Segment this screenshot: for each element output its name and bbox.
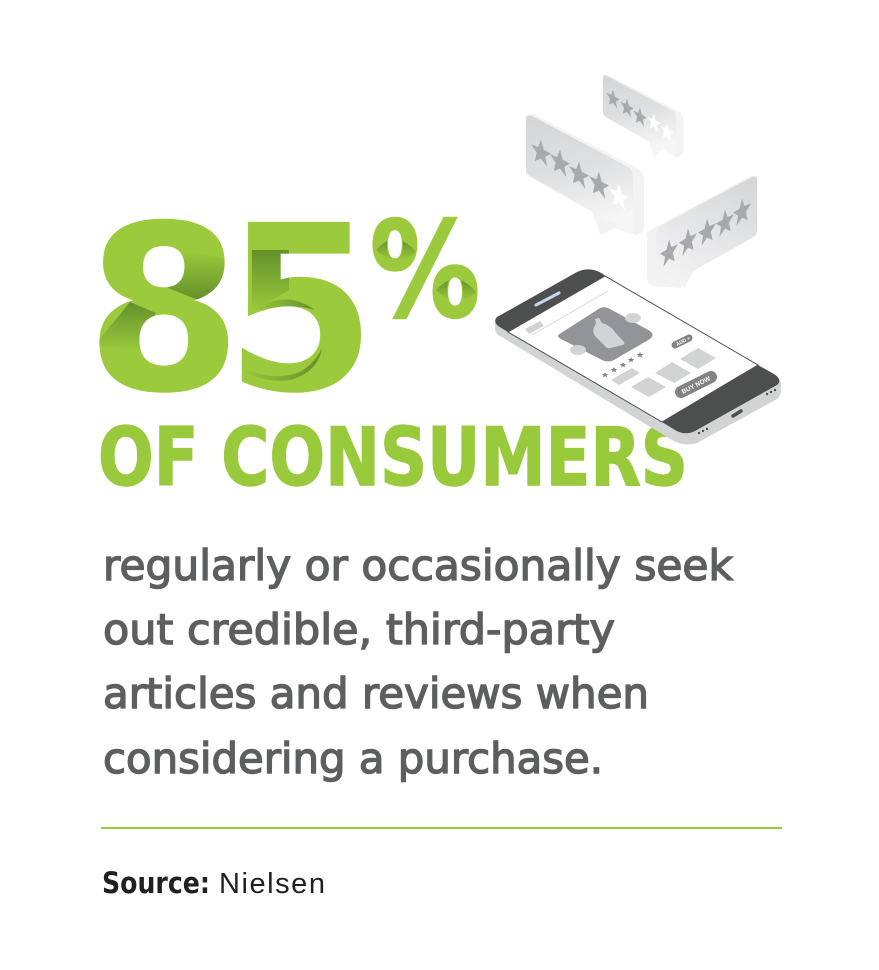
bottom bezel: [662, 365, 779, 433]
review bubble: three of five stars: [603, 75, 683, 158]
rating stars: [602, 352, 643, 377]
buy now button: [681, 377, 711, 392]
phone body: [495, 269, 781, 444]
body text: articles and reviews when: [103, 669, 649, 718]
body text: [103, 541, 734, 783]
source line: Source:: [102, 866, 210, 900]
infographic canvas: [99, 75, 782, 894]
product image tile: [558, 307, 652, 362]
source line: Nielsen: [219, 868, 325, 900]
body text: out credible, third-party: [103, 605, 615, 654]
thumbnails: [631, 377, 666, 397]
smartphone illustration: ADD +: [675, 336, 691, 348]
smartphone illustration: BUY NOW: [681, 375, 713, 396]
source line: [102, 866, 325, 900]
digit 5: 5: [225, 176, 376, 444]
top bezel: [495, 269, 605, 332]
review bubble: four of five stars: [526, 113, 644, 235]
percent sign: %: [370, 194, 480, 348]
speaker: [536, 293, 559, 305]
ribbon shading on digits: [95, 250, 322, 381]
headline: of consumers: OF CONSUMERS: [98, 411, 688, 504]
phone screen: [508, 276, 758, 422]
digit 8: 8: [86, 176, 242, 444]
body text: regularly or occasionally seek: [103, 541, 734, 590]
review bubble: five stars: [647, 176, 757, 288]
bottle: [593, 318, 624, 348]
body text: considering a purchase.: [103, 734, 603, 783]
ribbon shading on percent sign: [376, 239, 476, 301]
divider: [101, 827, 782, 829]
smartphone illustration: [495, 269, 781, 444]
charging port: [733, 411, 741, 416]
add button: [675, 338, 689, 345]
big statistic: 85%: [99, 216, 478, 393]
